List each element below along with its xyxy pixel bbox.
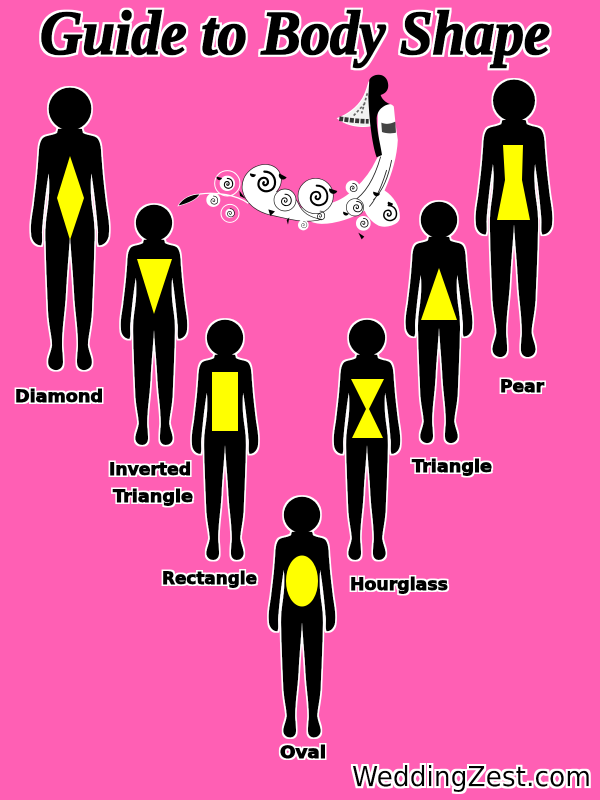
silhouette (121, 205, 187, 445)
label: Diamond (15, 387, 103, 407)
label: Pear (500, 377, 545, 397)
icon: hair and arm (368, 75, 390, 157)
yellow oval shape (286, 556, 318, 606)
label: Rectangle (162, 569, 257, 589)
yellow triangle shape (421, 268, 457, 320)
figure: Inverted Triangle (109, 205, 193, 507)
icon: leaf tail (178, 193, 248, 206)
silhouette (406, 202, 472, 443)
figure: Rectangle (162, 320, 258, 589)
silhouette (334, 320, 400, 560)
label: Oval (280, 743, 326, 763)
label: Hourglass (350, 575, 448, 595)
yellow rectangle shape (212, 372, 238, 431)
icon: bride gown and train (297, 105, 399, 226)
yellow pear shape (497, 145, 530, 220)
title: Guide to Body Shape (40, 0, 550, 68)
watermark: WeddingZest.com (352, 760, 591, 793)
silhouette (476, 80, 552, 357)
yellow inverted triangle shape (137, 259, 172, 314)
yellow hourglass shape (351, 379, 384, 438)
silhouette (269, 497, 335, 738)
illustration: bride with swirling train (178, 75, 399, 239)
icon: swirls (206, 164, 396, 239)
figure: Triangle (406, 202, 492, 477)
label: Triangle (113, 487, 193, 507)
yellow diamond shape (57, 156, 84, 240)
icon: veil (338, 82, 374, 126)
figure: Oval (269, 497, 335, 763)
silhouette (192, 320, 258, 560)
label: Inverted (109, 460, 191, 480)
figure: Diamond (15, 88, 109, 407)
silhouette (31, 88, 109, 370)
figure: Hourglass (334, 320, 448, 595)
figure: Pear (476, 80, 552, 397)
label: Triangle (412, 457, 492, 477)
